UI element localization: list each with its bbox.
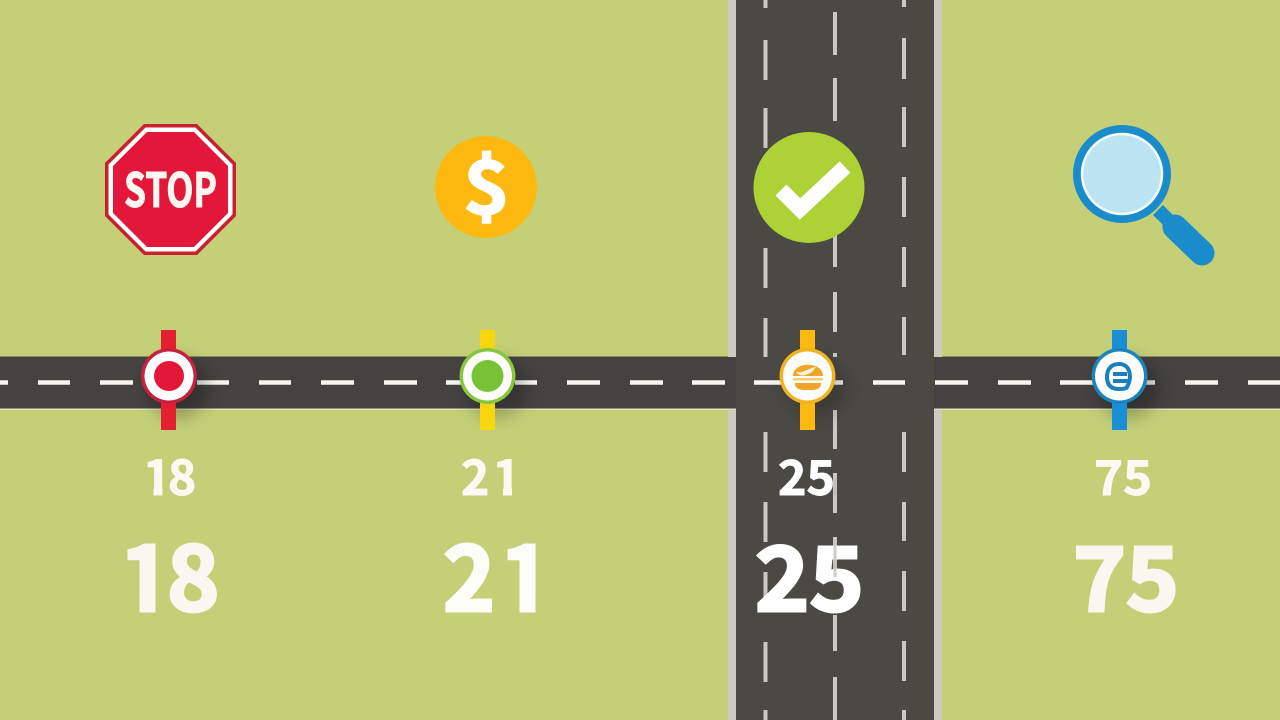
value: age 25 large: 25 bbox=[755, 508, 864, 637]
horizontal road: centre dashes bbox=[0, 380, 1280, 385]
icon: stop sign bbox=[105, 124, 236, 255]
centre lane dash showing through the 25 figures bbox=[834, 478, 836, 577]
label: age 25 small: 25 bbox=[778, 439, 835, 509]
marker: age 21 yellow and green pin bbox=[460, 330, 526, 430]
icon: stop sign: STOP bbox=[124, 152, 217, 221]
value: age 21 large: 21 bbox=[443, 508, 552, 637]
icon: magnifying glass bbox=[1073, 125, 1202, 253]
vertical road: left lane dashes bbox=[764, 0, 768, 720]
marker: age 25 orange pin with burger bbox=[780, 330, 847, 430]
vertical road: centre lane dashes bbox=[833, 12, 837, 720]
marker: age 75 blue pin with glyph bbox=[1092, 330, 1158, 430]
icon: dollar coin: $ bbox=[463, 129, 510, 236]
icon: check mark bbox=[754, 132, 864, 243]
blue glyph bbox=[1107, 364, 1130, 389]
icon: dollar coin bbox=[435, 129, 537, 238]
vertical road bbox=[728, 0, 942, 720]
value: age 75 large: 75 bbox=[1073, 508, 1179, 637]
value: age 18 large: 18 bbox=[120, 508, 220, 637]
label: age 75 small: 75 bbox=[1094, 439, 1152, 509]
horizontal road bbox=[0, 356, 1280, 410]
label: age 18 small: 18 bbox=[143, 439, 196, 509]
burger glyph bbox=[793, 365, 823, 390]
label: age 21 small: 21 bbox=[461, 439, 521, 509]
marker: age 18 red pin bbox=[141, 330, 208, 430]
vertical road: right lane dashes bbox=[902, 0, 906, 720]
